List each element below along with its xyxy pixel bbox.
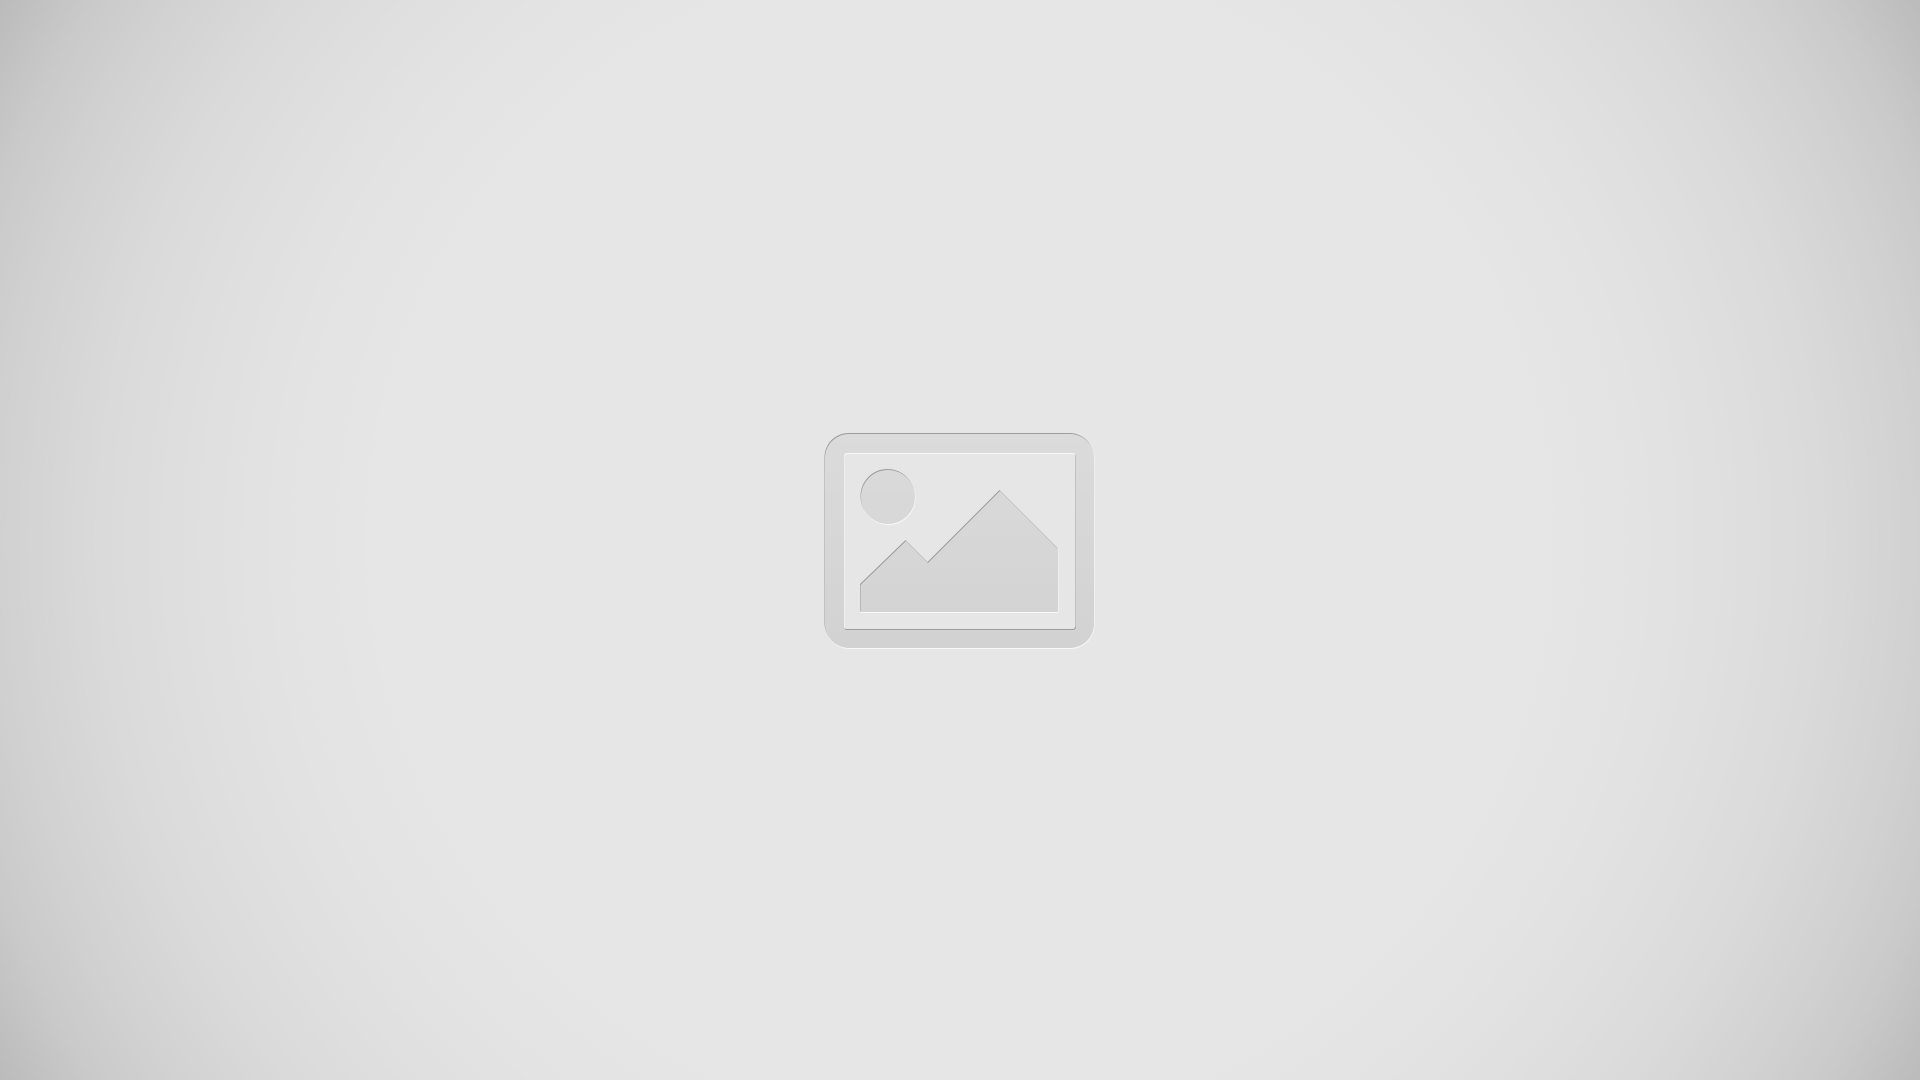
icon frame [825,434,1094,648]
icon mountains [860,491,1058,612]
icon shadow edge [824,433,1094,647]
icon highlight edge [826,435,1094,649]
icon sun [861,470,915,524]
